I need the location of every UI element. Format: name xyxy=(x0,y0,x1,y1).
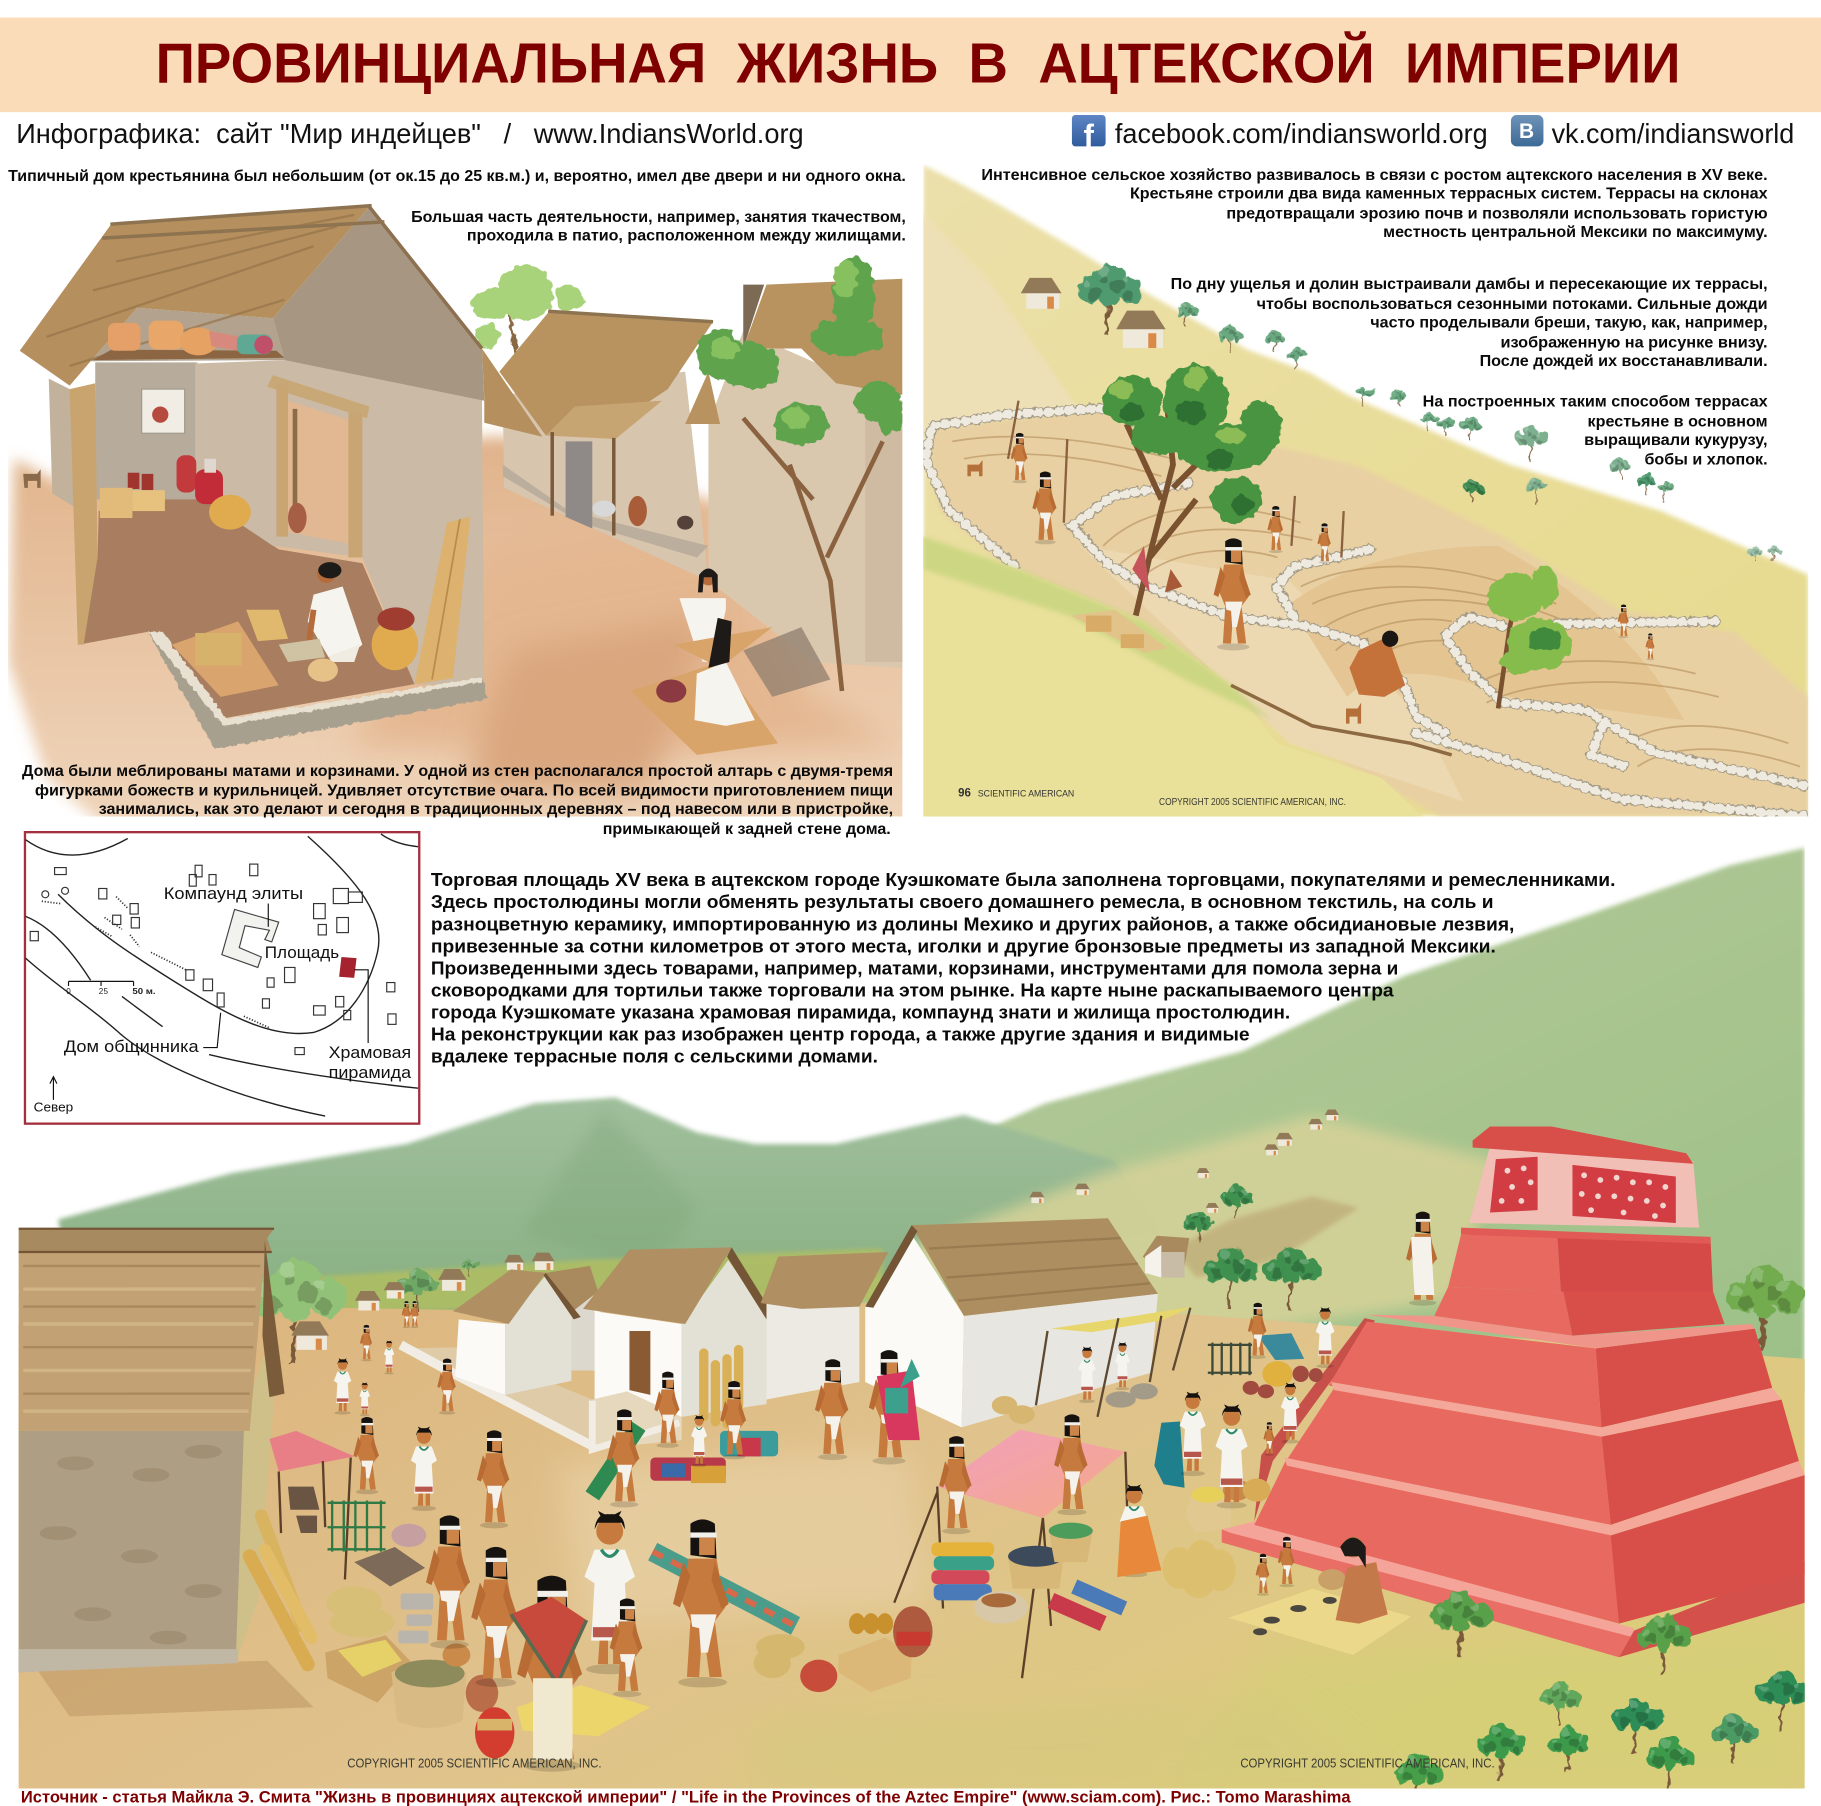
text: market square: Здесь простолюдины могли обменять результаты своего домашнего ремесла, в основном текстиль, на соль и xyxy=(431,891,1493,912)
text: intensive agriculture: Крестьяне строили два вида каменных террасных систем. Террасы на склонах xyxy=(1130,186,1768,203)
white house 2 xyxy=(583,1247,775,1449)
pink tents xyxy=(269,1430,1129,1678)
shelf with baskets xyxy=(93,321,285,360)
building shadow xyxy=(35,1661,314,1717)
copyright 2: COPYRIGHT 2005 SCIENTIFIC AMERICAN, INC. xyxy=(1240,1756,1495,1771)
low stone wall xyxy=(147,632,488,749)
tier 2 xyxy=(1434,1287,1572,1336)
baskets of goods xyxy=(1008,1556,1064,1589)
furrows xyxy=(952,437,1800,767)
panel: terrace farming illustration xyxy=(923,165,1808,816)
temple pyramid marker xyxy=(339,957,357,978)
scale bar: 50 м. xyxy=(132,987,156,996)
tree behind houses xyxy=(470,264,586,354)
right house xyxy=(685,279,902,668)
scale bar xyxy=(66,981,156,996)
door opening xyxy=(267,375,369,557)
teal textile roll carried xyxy=(653,1552,796,1626)
woman grinding corn xyxy=(308,562,362,662)
large tree xyxy=(1102,364,1281,616)
map labels: Площадь xyxy=(265,944,339,962)
big basket xyxy=(391,1663,467,1728)
text: market square: города Куэшкомате указана храмовая пирамида, компаунд знати и жилища простолюдин. xyxy=(431,1002,1290,1023)
brown bundle xyxy=(354,1547,425,1586)
text: intensive agriculture xyxy=(981,167,1768,241)
map labels: Дом общинника xyxy=(64,1038,200,1056)
yellow awning stall xyxy=(992,1307,1193,1424)
text: intensive agriculture: местность центральной Мексики по максимуму. xyxy=(1383,224,1768,241)
terrace hatch marks xyxy=(42,897,269,1028)
text: peasant house size: Типичный дом крестьянина был небольшим (от ок.15 до 25 кв.м.) и, вероятно, имел две двери и ни одного окна. xyxy=(8,168,906,185)
text: market square: разноцветную керамику, импортированную из долины Мехико и других районов, а также обсидиановые лезвия, xyxy=(431,913,1514,934)
text: house furnishings: занимались, как это делают и сегодня в традиционных деревнях – под навесом или в пристройке, xyxy=(99,801,893,818)
market goods left xyxy=(250,1350,933,1758)
text: crops xyxy=(1423,394,1768,469)
text: intensive agriculture: предотвращали эрозию почв и позволяли использовать гористую xyxy=(1226,205,1768,222)
icon: facebook: f xyxy=(1084,118,1095,153)
map labels: пирамида xyxy=(329,1064,412,1082)
woman weaving on mat with loom xyxy=(631,618,830,755)
main house: floor xyxy=(79,494,415,719)
facebook link: facebook.com/indiansworld.org xyxy=(1115,118,1488,149)
icon: facebook xyxy=(1072,115,1106,153)
magazine credit: SCIENTIFIC AMERICAN xyxy=(978,789,1074,799)
bird cage xyxy=(328,1501,386,1552)
map labels: Храмовая xyxy=(329,1044,411,1062)
grass bank xyxy=(923,537,1423,816)
base plinth xyxy=(1222,1525,1634,1657)
ground xyxy=(19,1301,1805,1789)
copyright: COPYRIGHT 2005 SCIENTIFIC AMERICAN, INC. xyxy=(1159,797,1346,808)
upper large tier xyxy=(1329,1322,1602,1427)
map buildings xyxy=(30,864,396,1055)
map labels: Компаунд элиты xyxy=(164,885,303,903)
back house xyxy=(499,311,713,581)
right tree xyxy=(697,254,902,691)
text: dams xyxy=(1171,276,1768,370)
stone stacks xyxy=(398,1593,433,1643)
text: patio activity xyxy=(411,209,906,244)
main house: side wall xyxy=(195,360,484,685)
pale lower slope xyxy=(923,214,1077,436)
title band xyxy=(0,17,1821,112)
hillside huts and trees xyxy=(1021,263,1780,561)
text: house furnishings xyxy=(22,763,893,838)
map labels xyxy=(34,885,412,1114)
dog xyxy=(23,469,41,488)
bottom tier xyxy=(1254,1459,1619,1624)
text: market square: сковородками для тортильи также торговали на этом рынке. На карте ныне раскапываемого центра xyxy=(431,979,1394,1000)
patio xyxy=(401,1347,592,1449)
left outer wall xyxy=(49,379,81,511)
panel: market town illustration xyxy=(19,848,1811,1806)
text: dams: чтобы воспользоваться сезонными потоками. Сильные дожди xyxy=(1257,296,1768,313)
text: crops: бобы и хлопок. xyxy=(1644,452,1768,469)
leaning rolled mats xyxy=(250,1516,311,1664)
standing woman spinning xyxy=(679,569,726,662)
under-roof shade xyxy=(91,308,285,361)
text: house furnishings: примыкающей к задней стене дома. xyxy=(603,821,891,838)
text: market square xyxy=(431,869,1615,1067)
text: crops: На построенных таким способом террасах xyxy=(1423,394,1768,411)
distant huts xyxy=(291,1253,555,1350)
erosion breach xyxy=(1231,685,1452,755)
title: ПРОВИНЦИАЛЬНАЯ ЖИЗНЬ В АЦТЕКСКОЙ ИМПЕРИИ xyxy=(156,31,1680,96)
jars and baskets in room xyxy=(100,455,307,533)
source credit: Источник - статья Майкла Э. Смита "Жизнь в провинциях ацтекской империи" / "Life in the Provinces of the Aztec Empire" (www.sciam.com). Рис.: Tomo Marashima xyxy=(21,1788,1352,1806)
icon: vk: B xyxy=(1519,120,1534,143)
bales xyxy=(326,1586,395,1638)
pottery box and jugs xyxy=(838,1638,912,1692)
text: patio activity: проходила в патио, расположенном между жилищами. xyxy=(467,227,906,244)
text: crops: выращивали кукурузу, xyxy=(1584,432,1768,449)
text: market square: Торговая площадь XV века в ацтекском городе Куэшкомате была заполнена торговцами, покупателями и ремесленниками. xyxy=(431,869,1615,890)
terraced soil xyxy=(926,407,1808,816)
patio wall xyxy=(401,1345,592,1446)
thatch xyxy=(19,1252,265,1431)
map labels: Север xyxy=(34,1099,73,1114)
middle tier xyxy=(1284,1388,1611,1525)
small tree xyxy=(1488,566,1571,708)
maize box xyxy=(325,1635,412,1703)
stair xyxy=(1254,1318,1375,1521)
panel: peasant house illustration xyxy=(8,206,929,836)
text: dams: По дну ущелья и долин выстраивали дамбы и пересекающие их террасы, xyxy=(1171,276,1768,293)
north arrow xyxy=(50,1077,57,1100)
gable wall xyxy=(273,207,484,401)
cage and pots xyxy=(1208,1343,1252,1375)
text: house furnishings: Дома были меблированы матами и корзинами. У одной из стен располагался простой алтарь с двумя-тремя xyxy=(22,763,893,780)
framed altar picture xyxy=(142,389,185,433)
shrubs and trees foreground xyxy=(1394,1591,1811,1806)
hillside xyxy=(923,165,1808,816)
textile stack xyxy=(931,1542,994,1600)
market goods right xyxy=(931,1333,1411,1655)
baskets on mat xyxy=(1071,610,1167,653)
map leaders xyxy=(203,904,368,1048)
mountain shading xyxy=(523,1109,697,1278)
trees behind pyramid xyxy=(1184,1184,1804,1351)
text: dams: После дождей их восстанавливали. xyxy=(1480,353,1768,370)
obsidian seller mat xyxy=(1229,1589,1411,1655)
textiles and mats mid xyxy=(650,1431,778,1483)
thatched roof xyxy=(20,206,542,437)
text: patio activity: Большая часть деятельности, например, занятия ткачеством, xyxy=(411,209,906,226)
white house 3 xyxy=(761,1252,888,1399)
yellow mat xyxy=(517,1685,650,1736)
ground xyxy=(8,436,929,836)
text: intensive agriculture: Интенсивное сельское хозяйство развивалось в связи с ростом ацтекского населения в XV веке. xyxy=(981,167,1768,184)
text: market square: Произведенными здесь товарами, например, матами, корзинами, инструментами для помола зерна и xyxy=(431,957,1398,978)
text: market square: привезенные за сотни километров от этого места, иголки и другие бронзовые предметы из западной Мексики. xyxy=(431,935,1496,956)
scale bar: 0 xyxy=(66,987,71,996)
text: dams: часто проделывали бреши, такую, как, например, xyxy=(1370,315,1768,332)
text: dams: изображенную на рисунке внизу. xyxy=(1500,334,1768,351)
big near house xyxy=(19,1229,285,1672)
vk link: vk.com/indiansworld xyxy=(1552,118,1794,149)
tier 1 xyxy=(1448,1235,1561,1291)
panel: map of Cuexcomate xyxy=(25,832,419,1124)
cornice xyxy=(1473,1127,1693,1164)
left mountain xyxy=(58,1098,1161,1324)
scale bar: 25 xyxy=(99,987,108,996)
subtitle: site name: Инфографика: сайт "Мир индейцев" / www.IndiansWorld.org xyxy=(16,118,804,149)
text: crops: крестьяне в основном xyxy=(1588,413,1768,430)
pyramid xyxy=(1222,1127,1805,1657)
stone terrace walls xyxy=(926,408,1808,816)
text: market square: На реконструкции как раз изображен центр города, а также другие здания и видимые xyxy=(431,1024,1250,1045)
small hut near trees xyxy=(1143,1236,1189,1278)
text: house furnishings: фигурками божеств и курильницей. Удивляет отсутствие очага. По всей видимости приготовлением пищи xyxy=(35,783,893,800)
map contour lines xyxy=(26,834,418,1116)
far huts on slope xyxy=(1029,1110,1339,1213)
back interior wall xyxy=(95,362,197,499)
white house 4 xyxy=(865,1218,1158,1427)
wooden door leaf xyxy=(70,383,98,645)
rolled mats leaning on wall xyxy=(415,517,470,684)
mats and baskets on floor xyxy=(172,607,418,697)
farmers xyxy=(967,401,1654,724)
market people xyxy=(334,1212,1437,1772)
text: market square: вдалеке террасные поля с сельскими домами. xyxy=(431,1046,878,1067)
white house 1 xyxy=(453,1266,598,1395)
elite compound xyxy=(222,909,279,967)
left trees xyxy=(249,1258,478,1365)
bales xyxy=(1163,1540,1236,1598)
textile rolls xyxy=(1051,1600,1103,1624)
right mountain xyxy=(650,848,1805,1394)
bales near roll xyxy=(754,1634,805,1678)
fields on slope xyxy=(906,1115,1498,1336)
page number: 96 xyxy=(958,787,971,800)
copyright 1: COPYRIGHT 2005 SCIENTIFIC AMERICAN, INC. xyxy=(347,1756,602,1771)
icon: vk xyxy=(1511,115,1543,146)
temple room xyxy=(1469,1146,1699,1228)
painted pots xyxy=(442,1643,470,1667)
